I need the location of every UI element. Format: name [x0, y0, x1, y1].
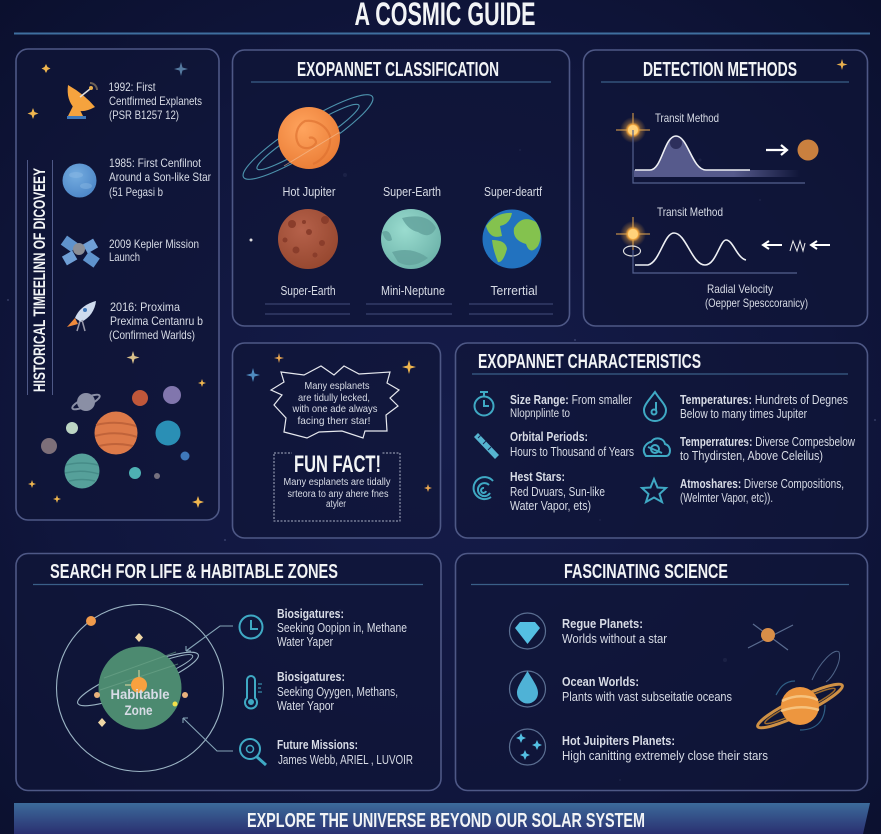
- text: future missions: Future Missions:: [277, 738, 358, 752]
- text: size range: [510, 393, 632, 420]
- text: 1995: Around a Son-like Star: [109, 170, 211, 184]
- callout: fun fact box: Many esplanets are tidally: [284, 477, 390, 488]
- heading: characteristics: EXOPANNET CHARACTERISTICS: [478, 351, 701, 373]
- callout: fun fact box: srteora to any ahere fnes: [288, 489, 388, 500]
- text: orbital periods: [510, 430, 634, 459]
- text: future missions: James Webb, ARIEL , LUVOIR: [278, 753, 413, 767]
- heading: fascinating science: FASCINATING SCIENCE: [564, 561, 728, 583]
- callout: starburst: with one ade always: [292, 403, 378, 415]
- text: temperatures 2: Temperratures: Diverse Compesbelow: [680, 435, 856, 449]
- text: temperatures 1: [680, 393, 848, 421]
- text: atmospheres: [680, 477, 844, 505]
- callout: starburst: facing therr star!: [298, 415, 370, 427]
- planet: teal mini-neptune: [381, 209, 441, 269]
- icon: sparkles: [510, 729, 546, 765]
- labels: classification row 1: [282, 184, 542, 199]
- text: temperatures 2: [680, 435, 856, 463]
- arrow: right: [766, 145, 787, 155]
- text: temperatures 1: Below to many times Jupiter: [680, 407, 807, 421]
- callout: starburst: Many esplanets: [304, 380, 370, 392]
- text: host stars: Water Vapor, ets): [510, 499, 591, 513]
- text: 1992: 1992: First: [108, 80, 156, 94]
- callout: fun fact box: FUN FACT!: [294, 451, 381, 478]
- chart: transit method: [616, 111, 818, 183]
- text: orbital periods: Orbital Periods:: [510, 430, 588, 444]
- text: biosignatures 2: Seeking Oyygen, Methans,: [277, 685, 398, 699]
- text: 2016: Prexima Centanru b: [110, 314, 203, 328]
- icon: clock: [240, 616, 262, 638]
- icon: satellite: [61, 236, 100, 268]
- icon: rocket: [67, 301, 96, 331]
- arrow: magnifier to zone: [183, 718, 233, 751]
- labels: classification row 1: Super-Earth: [383, 184, 441, 199]
- text: future missions: [277, 738, 413, 767]
- text: biosignatures 1: Seeking Oopipn in, Methane: [277, 621, 407, 635]
- panel: fun fact: [232, 343, 440, 538]
- text: biosignatures 2: [277, 670, 398, 713]
- labels: classification row 2: Terrertial: [490, 283, 538, 298]
- panel: historical timeline: [16, 49, 219, 520]
- icon: flame drop: [644, 392, 666, 421]
- arrows: velocity shift: [763, 241, 830, 249]
- text: host stars: [510, 470, 605, 513]
- callout: fun fact box: [274, 450, 400, 521]
- icon: blue planet: [62, 164, 96, 198]
- chart: radial velocity: Transit Method: [657, 205, 723, 219]
- text: host stars: Red Dvuars, Sun-like: [510, 485, 605, 499]
- vertical heading: historical timeline: HISTORICAL TIMEELINN OF DICOVEEY: [30, 168, 49, 392]
- illustration: planet cluster: [41, 386, 190, 488]
- text: biosignatures 2: Biosigatures:: [277, 670, 345, 684]
- callout: starburst: [271, 366, 399, 438]
- footer banner: EXPLORE THE UNIVERSE BEYOND OUR SOLAR SYSTEM: [247, 810, 645, 832]
- labels: classification row 1: Super-deartf: [484, 184, 542, 199]
- illustration: ringed planet: [754, 651, 846, 734]
- planet: rocky red: [278, 209, 338, 269]
- text: 2009: 2009 Kepler Mission: [109, 237, 199, 251]
- text: atmospheres: Atmoshares: Diverse Compositions,: [680, 477, 844, 491]
- text: 1992: [108, 80, 202, 122]
- decorative stars: timeline panel: [28, 62, 206, 508]
- text: 1995: (51 Pegasi b: [109, 185, 163, 199]
- text: 2009: [109, 237, 199, 264]
- text: ocean worlds: [562, 675, 732, 704]
- text: 1995: [109, 156, 211, 199]
- labels: classification row 2: [280, 283, 538, 298]
- text: biosignatures 1: [277, 607, 407, 649]
- icon: thermometer: [245, 676, 262, 708]
- illustration: small rogue planet: [748, 624, 793, 650]
- callout: fun fact box: atyler: [326, 499, 347, 510]
- text: 2016: (Confirmed Warlds): [109, 328, 195, 342]
- icon: water drop: [510, 671, 546, 707]
- callout: starburst: are tidully lecked,: [298, 392, 370, 404]
- arrow: clock to zone: [186, 626, 233, 651]
- text: biosignatures 1: Biosigatures:: [277, 607, 344, 621]
- planet: earth: [482, 210, 542, 268]
- text: 2016: [109, 300, 203, 342]
- heading: detection: DETECTION METHODS: [643, 59, 797, 81]
- labels: classification row 2: Mini-Neptune: [381, 283, 445, 298]
- panel: fascinating science: [456, 554, 868, 790]
- text: temperatures 2: to Thydirsten, Above Celeilus): [680, 449, 823, 463]
- text: 1992: (PSR B1257 12): [109, 108, 179, 122]
- panel: exoplanet characteristics: [456, 343, 868, 538]
- text: 2016: 2016: Proxima: [110, 300, 180, 314]
- text: radial velocity caption: Radial Velocity: [707, 282, 773, 296]
- planet: transit: [798, 140, 818, 160]
- text: rogue planets: [562, 617, 667, 646]
- icon: swirl: [474, 477, 493, 499]
- text: biosignatures 2: Water Yapor: [277, 699, 334, 713]
- text: hot jupiters: Hot Juipiters Planets:: [562, 734, 675, 748]
- text: ocean worlds: Ocean Worlds:: [562, 675, 639, 689]
- chart: transit method: Transit Method: [655, 111, 719, 125]
- planet: hot jupiter with rings: [236, 84, 380, 190]
- text: rogue planets: Regue Planets:: [562, 617, 643, 631]
- icon: radio dish: [67, 83, 97, 119]
- text: biosignatures 1: Water Yaper: [277, 635, 333, 649]
- labels: classification row 2: Super-Earth: [280, 283, 336, 298]
- labels: classification row 1: Hot Jupiter: [282, 184, 336, 199]
- chart: radial velocity: [616, 205, 830, 273]
- text: orbital periods: Hours to Thousand of Years: [510, 445, 634, 459]
- text: ocean worlds: Plants with vast subseitatie oceans: [562, 690, 732, 704]
- text: host stars: Hest Stars:: [510, 470, 565, 484]
- text: radial velocity caption: (Oepper Spesccoranicy): [705, 296, 808, 310]
- panel: exoplanet classification: [232, 50, 570, 326]
- heading: search for life: SEARCH FOR LIFE & HABITABLE ZONES: [50, 561, 338, 583]
- diagram: habitable zone: Habitable: [110, 686, 170, 702]
- text: 2009: Launch: [109, 250, 140, 264]
- text: hot jupiters: High canitting extremely close their stars: [562, 749, 768, 763]
- panel: detection methods: [584, 50, 868, 326]
- text: temperatures 1: Temperatures: Hundrets of Degnes: [680, 393, 848, 407]
- diagram: habitable zone: Zone: [124, 702, 153, 718]
- icon: cloud atom: [644, 438, 670, 456]
- icon: diamond: [510, 613, 546, 649]
- text: radial velocity caption: [705, 282, 808, 310]
- text: size range: Size Range: From smaller: [510, 393, 632, 407]
- diagram: habitable zone: [56, 604, 224, 772]
- icon: ruler: [474, 433, 499, 459]
- icon: star: [642, 479, 666, 502]
- text: 1995: 1985: First Cenfilnot: [109, 156, 202, 170]
- text: rogue planets: Worlds without a star: [562, 632, 667, 646]
- text: hot jupiters: [562, 734, 768, 763]
- title underline: [14, 32, 870, 34]
- icon: stopwatch: [474, 392, 494, 416]
- heading: classification: EXOPANNET CLASSIFICATION: [297, 59, 499, 81]
- decorative stars: fun fact: [246, 353, 432, 492]
- text: 1992: Centfirmed Explanets: [109, 94, 202, 108]
- footer banner: [14, 803, 870, 834]
- panel: search for life: [16, 554, 441, 790]
- icon: magnifier: [240, 739, 266, 765]
- text: size range: Nlopnplinte to: [510, 408, 570, 420]
- text: atmospheres: (Welmter Vapor, etc)).: [680, 491, 773, 505]
